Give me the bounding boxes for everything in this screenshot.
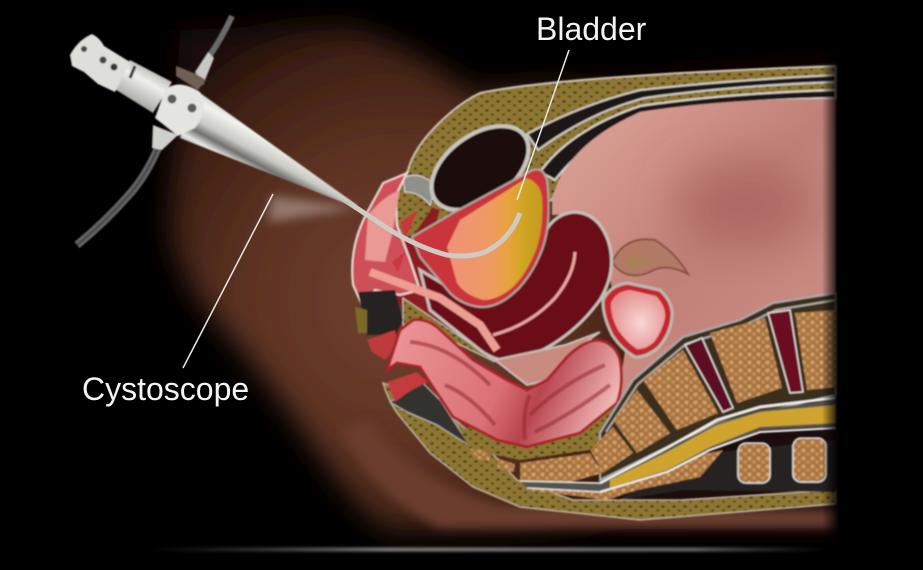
- muscle wedge: [355, 290, 403, 360]
- cone: [180, 90, 357, 208]
- abdominal cavity: [551, 98, 836, 349]
- upper tube: [208, 16, 232, 58]
- anal region: [387, 372, 470, 446]
- lower port: [152, 125, 178, 150]
- upper port: [195, 52, 214, 85]
- illustration: cystoscopy cross-section: [69, 14, 838, 554]
- labia tissue: [352, 173, 420, 305]
- cystoscope: [70, 16, 357, 245]
- spinal canal: [520, 398, 836, 492]
- label: Bladder: Bladder: [536, 11, 647, 47]
- table highlight: [150, 548, 830, 551]
- bone fragments and spinous processes: [527, 438, 826, 500]
- backing tissue behind urethra: [396, 201, 456, 333]
- lower fat strip behind rectum: [460, 406, 616, 461]
- perineal fat layer: [383, 383, 836, 520]
- hub: [155, 84, 204, 136]
- light spray from scope tip: [268, 196, 357, 222]
- pubic bone: [428, 122, 532, 212]
- ovary: [612, 239, 688, 275]
- right edge fade: [822, 0, 840, 570]
- vertebrae: [643, 350, 718, 430]
- pubic joint ridges: [403, 175, 436, 205]
- fat between urethra and rectum: [403, 298, 495, 362]
- barrel: [113, 60, 172, 113]
- spine: [470, 293, 836, 487]
- inner shaft of cystoscope: [340, 197, 520, 256]
- patient body silhouette: [170, 25, 860, 530]
- intervertebral discs: [685, 338, 733, 412]
- rectum: [387, 320, 621, 447]
- pouch between uterus and rectum: [495, 332, 600, 385]
- label line: bladder: [517, 50, 569, 200]
- pelvic anatomy: [352, 66, 836, 520]
- eyepiece: [70, 34, 130, 92]
- lower tube: [77, 148, 158, 245]
- label line: cystoscope: [183, 194, 273, 368]
- cervix: [603, 283, 672, 357]
- bladder: [412, 169, 549, 307]
- abdominal wall fat layer: [396, 66, 836, 235]
- uterus: [420, 212, 612, 361]
- black fascia bands: [527, 75, 836, 150]
- urethra strip: [370, 272, 497, 350]
- tissue between cervix and spine: [619, 352, 636, 398]
- label: Cystoscope: Cystoscope: [82, 371, 249, 407]
- muscles behind spine: [617, 440, 836, 500]
